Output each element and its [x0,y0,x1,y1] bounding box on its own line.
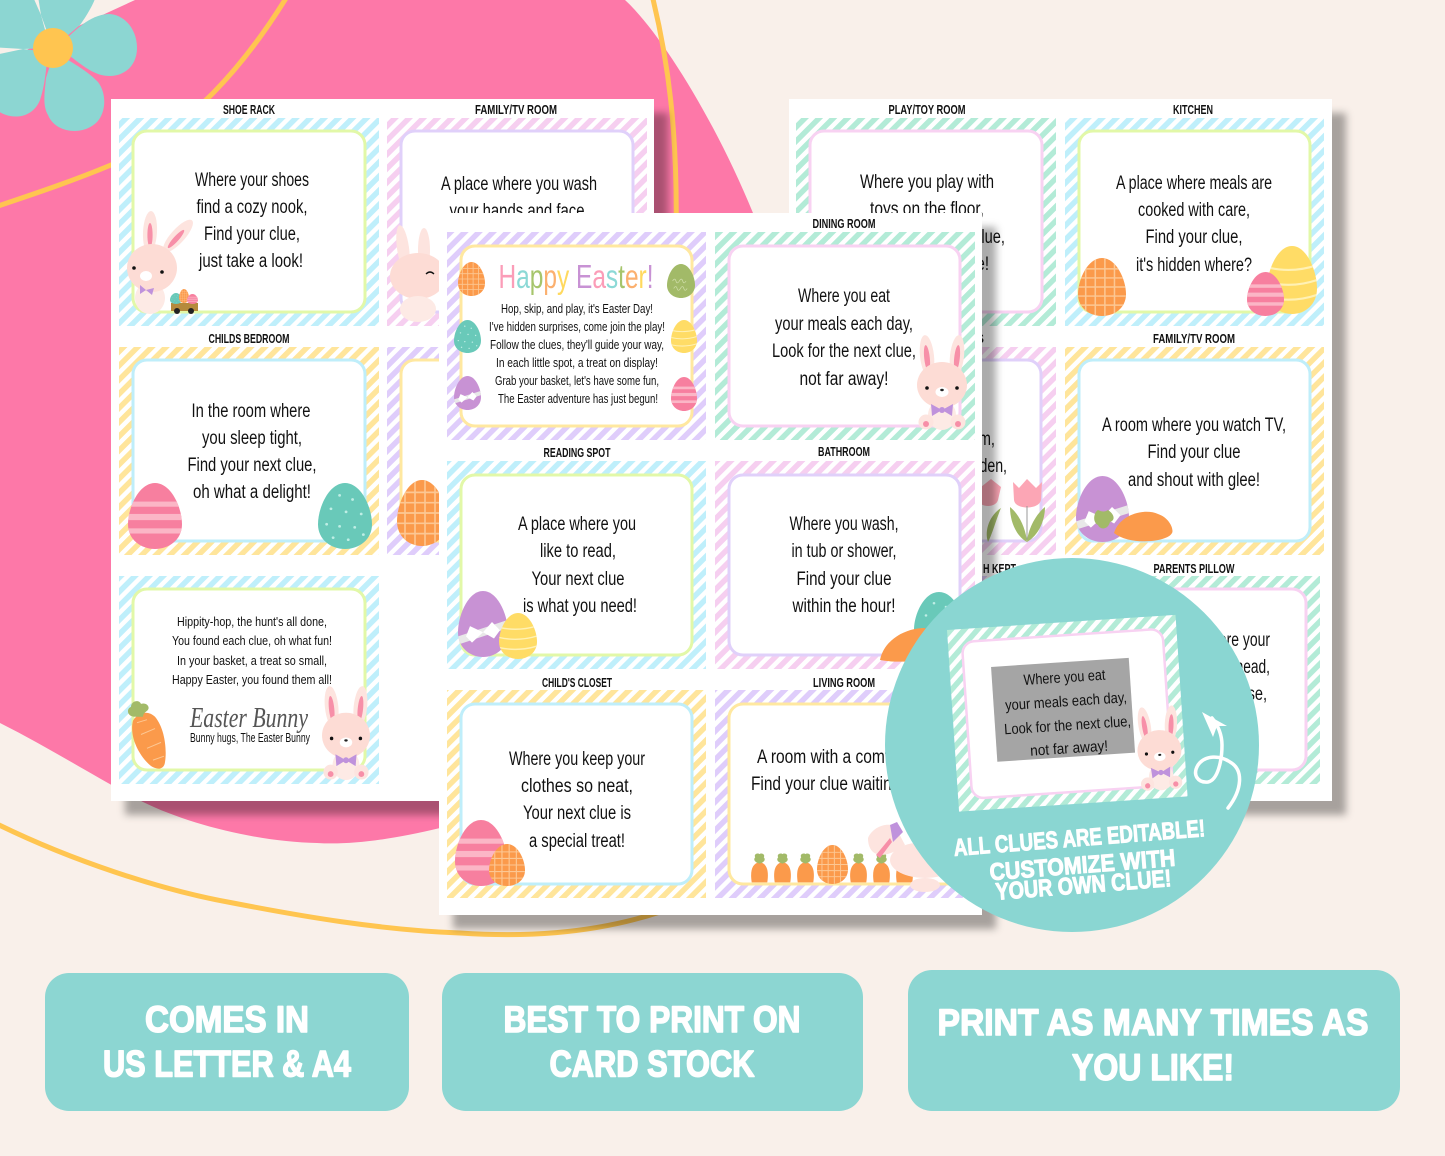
rotated sample card [947,615,1188,812]
button: print times [908,970,1400,1111]
card: shoe rack: Find your clue, [204,224,300,245]
card: play/toy room [796,103,1056,326]
card: dining room: Look for the next clue, [772,341,916,362]
card: garden: garden, [959,456,1007,477]
card: reading spot [447,446,706,669]
card: shoe rack: Where your shoes [195,170,309,191]
card: family/tv room 2: and shout with glee! [1128,470,1260,491]
rotated sample card: your meals each day, [1005,689,1127,714]
card: childs bedroom: In the room where [192,401,310,422]
yellow curved lines [0,0,676,935]
card: happy easter: I've hidden surprises, come join the play! [489,319,665,334]
card: play/toy room: look more! [919,254,989,275]
card: family/tv room 2: FAMILY/TV ROOM [1153,332,1235,346]
card: play/toy room: toys on the floor, [870,199,984,220]
card: childs bedroom: CHILDS BEDROOM [208,332,290,346]
card: reading spot: is what you need! [523,596,637,617]
card: final note [119,576,379,784]
card: happy easter: Hop, skip, and play, it's Easter Day! [501,301,653,316]
card: living room: A room with a comfy seat, [757,747,935,768]
card: final note: Bunny hugs, The Easter Bunny [190,730,310,745]
card: family/tv room: FAMILY/TV ROOM [475,103,557,117]
callout text: CUSTOMIZE WITH [989,845,1176,886]
heading: happy easter: Happy Easter! [498,258,654,295]
card: family/tv room 2: A room where you watch TV, [1102,415,1286,436]
panel: left sheet [111,99,654,801]
card: play/toy room: PLAY/TOY ROOM [888,103,966,117]
card: shoe rack: just take a look! [198,251,303,272]
card: bathroom: BATHROOM [818,445,870,459]
card: childs bedroom [119,332,379,555]
button: card stock: CARD STOCK [550,1044,755,1084]
card: final note: Happy Easter, you found them all! [172,672,332,687]
card: partially hidden [387,347,647,555]
card: reading spot: READING SPOT [544,446,611,460]
button: paper size: US LETTER & A4 [103,1044,351,1084]
button: print times: PRINT AS MANY TIMES AS [938,1002,1368,1043]
card: bathroom: in tub or shower, [792,541,896,562]
card: parents pillow: a surprise, [1199,684,1267,705]
card: shoe rack: find a cozy nook, [196,197,308,218]
card: parents pillow: sleepy head, [1192,657,1270,678]
card: bathroom: Find your clue [796,569,892,590]
card: dining room: DINING ROOM [812,217,876,231]
panel: editable callout [885,558,1259,932]
card: family/tv room 2 [1065,332,1324,555]
card: happy easter: The Easter adventure has just begun! [498,391,658,406]
card: reading spot: Your next clue [532,569,624,590]
card: hidden left [796,562,1056,784]
card: happy easter: Grab your basket, let's have some fun, [495,373,659,388]
card: garden [796,332,1056,555]
card: garden: your room, [925,429,995,450]
button: card stock: BEST TO PRINT ON [504,999,800,1040]
card: parents pillow: Where your [1198,630,1270,651]
rotated sample card: Where you eat [1023,667,1107,689]
card: happy easter: Follow the clues, they'll guide your way, [490,337,664,352]
callout text [953,815,1206,906]
card: kitchen: KITCHEN [1173,103,1213,117]
card: kitchen: it's hidden where? [1136,255,1252,276]
card: final note: Easter Bunny [189,702,308,734]
pink blob [0,0,770,843]
sheet [789,99,1332,801]
card: play/toy room: Find your clue, [909,227,1005,248]
sheet [111,99,654,801]
card: living room [715,676,975,898]
card: final note: Hippity-hop, the hunt's all done, [177,614,327,629]
icon: looping arrow [1196,712,1240,808]
card: play/toy room: Where you play with [860,172,994,193]
card: final note: You found each clue, oh what fun! [172,633,332,648]
card: child's closet: Where you keep your [509,749,646,770]
callout text: ALL CLUES ARE EDITABLE! [953,815,1206,862]
card: dining room [715,217,975,440]
card: living room: LIVING ROOM [813,676,875,690]
card: childs bedroom: oh what a delight! [193,482,311,503]
card: child's closet: a special treat! [529,831,625,852]
card: living room: Find your clue waiting for you, [751,774,956,795]
sheet [439,213,982,915]
card: kitchen: Find your clue, [1146,227,1242,248]
card: dining room: your meals each day, [775,314,913,335]
card: happy easter: In each little spot, a treat on display! [496,355,658,370]
panel: right sheet [789,99,1332,801]
card: bathroom: Where you wash, [790,514,898,535]
card: kitchen: A place where meals are [1116,173,1272,194]
card: childs bedroom: you sleep tight, [202,428,302,449]
icon: flower [0,0,137,131]
button: paper size [45,973,409,1111]
card: dining room: not far away! [800,369,888,390]
card: child's closet: Your next clue is [523,803,631,824]
card: child's closet: CHILD'S CLOSET [542,676,612,690]
card: kitchen [1065,103,1324,326]
card: dining room: Where you eat [798,286,891,307]
card: bathroom: within the hour! [792,596,896,617]
card: parents pillow: PARENTS PILLOW [1154,562,1235,576]
card: shoe rack: SHOE RACK [223,103,275,117]
card: family/tv room: A place where you wash [441,174,597,195]
card: family/tv room 2: Find your clue [1148,442,1240,463]
card: child's closet: clothes so neat, [521,776,633,797]
card: final note: In your basket, a treat so small, [177,653,327,668]
teal circle [885,558,1259,932]
card: family/tv room: your hands and face [450,201,584,222]
editable text field [991,658,1135,762]
rotated sample card: Look for the next clue, [1004,713,1132,738]
card: happy easter [447,232,706,440]
card: kitchen: cooked with care, [1138,200,1250,221]
card: family/tv room [387,103,647,326]
card: child's closet [447,676,706,898]
panel: center sheet [439,213,982,915]
rotated sample card: not far away! [1030,738,1109,760]
button: card stock [442,973,863,1111]
card: parents pillow [1065,562,1320,784]
button: paper size: COMES IN [145,999,309,1040]
card: bathroom [715,445,975,669]
callout text: YOUR OWN CLUE! [995,865,1172,906]
card: hidden left: H KEPT [983,562,1016,576]
card: childs bedroom: Find your next clue, [188,455,316,476]
card: garden: S [976,332,984,346]
button: print times: YOU LIKE! [1072,1047,1234,1088]
card: reading spot: like to read, [540,541,616,562]
card: shoe rack [119,103,379,326]
card: reading spot: A place where you [518,514,636,535]
